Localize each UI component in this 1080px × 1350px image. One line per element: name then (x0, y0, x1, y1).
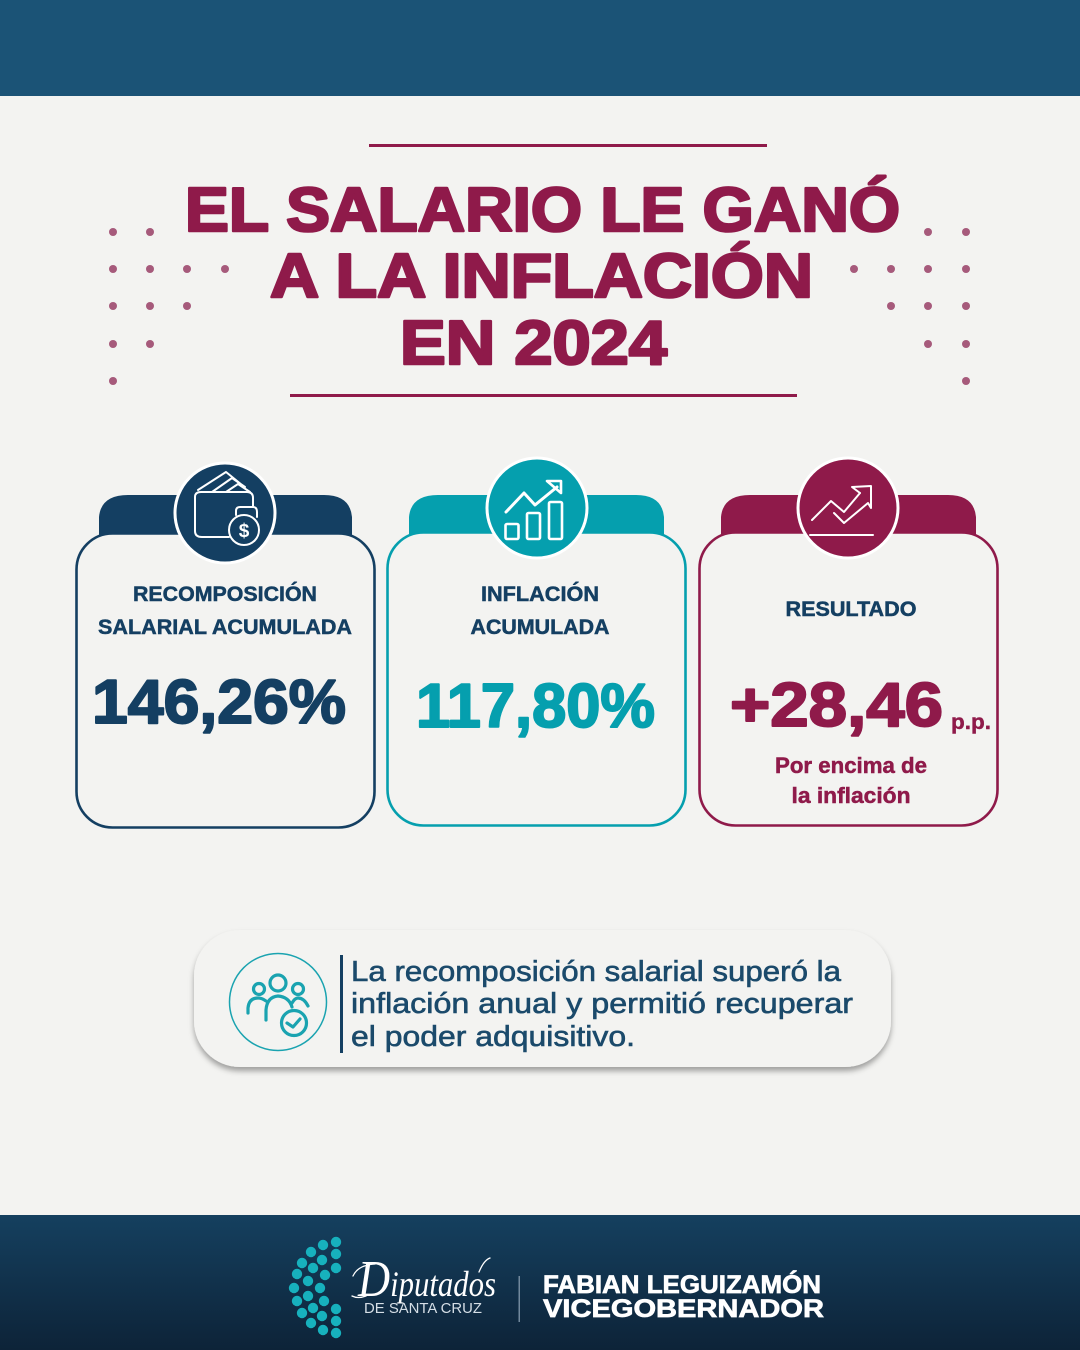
card tab (99, 495, 352, 535)
title (185, 176, 900, 378)
footer name: VICEGOBERNADOR (543, 1295, 824, 1323)
unit: p.p. (951, 711, 991, 734)
note (775, 753, 927, 808)
callout pill (194, 930, 891, 1067)
card heading: SALARIAL ACUMULADA (98, 616, 352, 639)
footer divider (518, 1276, 520, 1322)
callout text: La recomposición salarial superó la (351, 956, 841, 988)
callout (194, 930, 891, 1067)
value: 146,26% (92, 668, 346, 737)
title rule top (369, 144, 767, 147)
dots left (109, 228, 229, 385)
icon: wallet (175, 463, 275, 563)
card heading: RESULTADO (786, 598, 916, 621)
card outline (76, 534, 374, 828)
footer band (0, 1215, 1080, 1350)
title rule bottom (290, 394, 797, 397)
callout text: el poder adquisitivo. (351, 1021, 635, 1053)
card tab (409, 495, 664, 535)
panel: resultado (700, 458, 998, 826)
card heading (470, 582, 610, 639)
card tab (721, 495, 976, 535)
icon: trend (798, 458, 898, 558)
card heading: ACUMULADA (470, 616, 610, 639)
dots right (850, 228, 970, 385)
value: 117,80% (416, 672, 655, 741)
card outline (700, 532, 998, 826)
panel: inflación acumulada (388, 458, 686, 826)
icon: chart bars (487, 458, 587, 558)
card heading (98, 582, 352, 639)
card outline (388, 532, 686, 826)
logo: wordmark: DE SANTA CRUZ (364, 1300, 482, 1317)
top band (0, 0, 1080, 96)
title: EL SALARIO LE GANÓ (185, 176, 900, 245)
footer name (543, 1269, 824, 1323)
footer name: FABIAN LEGUIZAMÓN (543, 1269, 821, 1299)
title: A LA INFLACIÓN (270, 242, 813, 311)
icon: people check (230, 954, 326, 1050)
card heading: RECOMPOSICIÓN (133, 582, 317, 606)
callout text (351, 956, 854, 1053)
note: la inflación (792, 783, 910, 808)
logo: wordmark: Diputados (357, 1251, 496, 1308)
title: EN 2024 (400, 309, 668, 378)
divider (340, 955, 343, 1053)
card heading: INFLACIÓN (481, 582, 599, 606)
panel: recomposición salarial (76, 463, 374, 828)
logo: dots (289, 1237, 341, 1338)
note: Por encima de (775, 753, 927, 778)
icon: wallet: $ (239, 521, 250, 542)
value: +28,46 (730, 671, 943, 740)
callout text: inflación anual y permitió recuperar (351, 988, 854, 1020)
